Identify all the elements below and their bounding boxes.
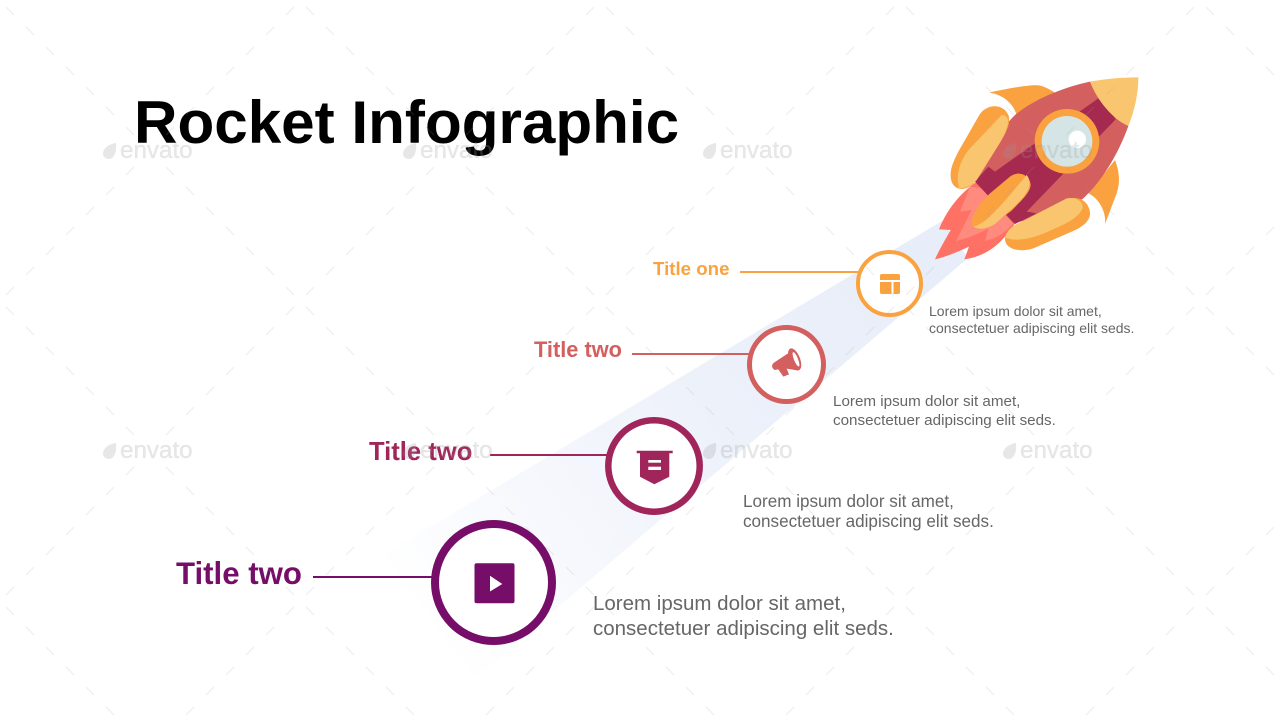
step circle (858, 252, 921, 315)
step circle (750, 328, 824, 402)
connector line (313, 576, 433, 578)
watermarks: envato (120, 437, 193, 464)
step circle (435, 524, 552, 641)
description text: Lorem ipsum dolor sit amet, (743, 492, 954, 511)
heading: title two: Title two (369, 438, 472, 466)
step 1: title two (176, 524, 894, 641)
icon: rocket (935, 77, 1138, 259)
connector line (490, 454, 607, 456)
watermarks: envato (120, 137, 193, 164)
watermarks (103, 137, 1093, 464)
icon: megaphone (772, 347, 804, 377)
step 4: title one (653, 252, 1134, 336)
icon: ribbon badge (637, 451, 673, 484)
connector line (740, 271, 860, 273)
heading: title one: Title one (653, 258, 730, 279)
title: Rocket Infographic (134, 89, 679, 156)
description text: consectetuer adipiscing elit seds. (929, 320, 1134, 336)
step 2: title two (369, 420, 994, 531)
description text: Lorem ipsum dolor sit amet, (833, 393, 1020, 410)
icon: play button (474, 563, 514, 603)
description text: consectetuer adipiscing elit seds. (743, 512, 994, 531)
connector line (632, 353, 750, 355)
watermarks: envato (420, 437, 493, 464)
heading: title two: Title two (176, 556, 302, 591)
heading: title two: Title two (534, 337, 622, 362)
description text: consectetuer adipiscing elit seds. (593, 617, 894, 640)
description text: Lorem ipsum dolor sit amet, (593, 592, 846, 615)
step 3: title two (534, 328, 1056, 429)
icon: layout (880, 274, 900, 294)
description text: consectetuer adipiscing elit seds. (833, 412, 1056, 429)
watermarks: envato (420, 137, 493, 164)
watermarks: envato (1020, 137, 1093, 164)
watermarks: envato (720, 437, 793, 464)
rocket exhaust beam (378, 221, 968, 682)
description text: Lorem ipsum dolor sit amet, (929, 303, 1102, 319)
watermarks: envato (720, 137, 793, 164)
step circle (608, 420, 700, 512)
watermarks: envato (1020, 437, 1093, 464)
